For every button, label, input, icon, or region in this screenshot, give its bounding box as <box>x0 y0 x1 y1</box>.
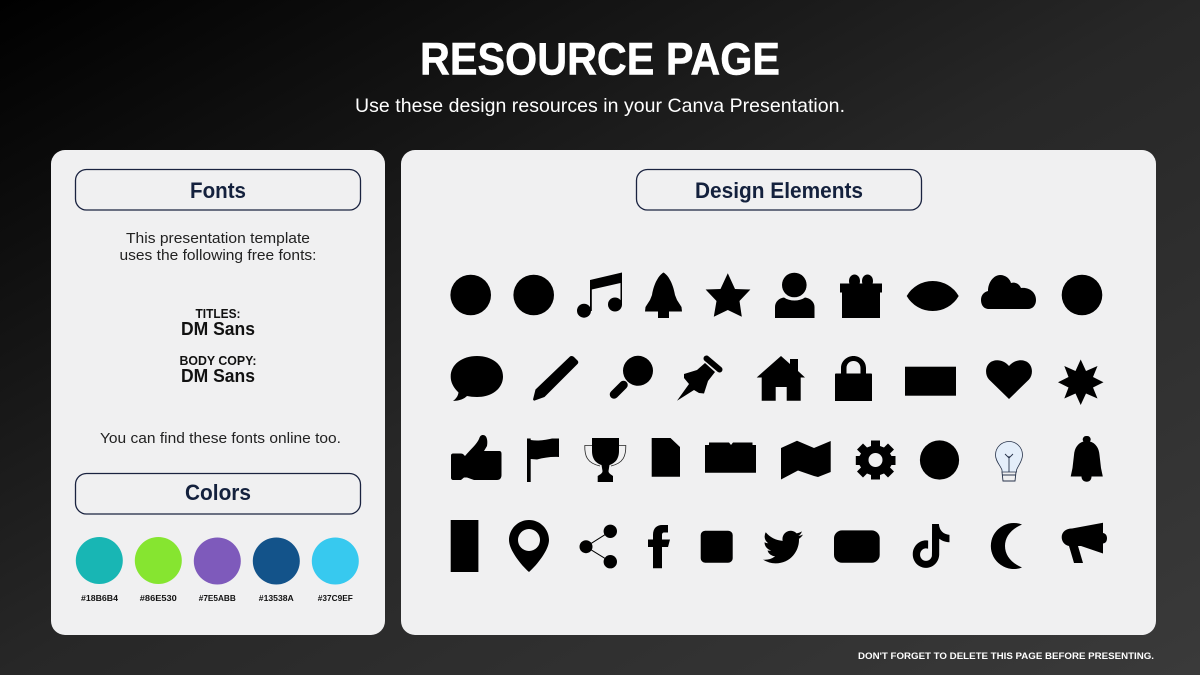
icon: circle <box>513 275 554 315</box>
icon: tall rectangle <box>451 520 478 572</box>
panel: fonts and colors <box>51 150 385 635</box>
icon: lens shape <box>907 281 959 311</box>
icon: light bulb <box>996 442 1022 481</box>
heading: design elements <box>636 170 922 210</box>
color codes: #7E5ABB <box>199 593 236 603</box>
icon: rectangle <box>905 367 956 396</box>
icon: circle <box>450 275 491 315</box>
icon: house <box>757 356 805 401</box>
text block: font intro: This presentation template <box>126 231 310 247</box>
text block: title font <box>181 307 255 339</box>
icon: map pin <box>509 520 549 572</box>
color codes: #37C9EF <box>318 593 353 603</box>
icon: circle <box>920 440 959 480</box>
icon: starburst <box>1058 360 1104 405</box>
color codes <box>81 593 353 603</box>
icon: person <box>775 273 814 318</box>
heading: colors: Colors <box>185 480 251 505</box>
icon: twitter <box>763 531 803 563</box>
heading: fonts: Fonts <box>190 178 246 203</box>
icon: music notes <box>577 272 622 318</box>
color codes: #86E530 <box>140 593 177 603</box>
text block: body font <box>180 354 256 386</box>
icon grid <box>450 272 1107 572</box>
text block: font intro <box>120 231 316 264</box>
icon: pencil <box>533 356 578 401</box>
icon: rocket <box>645 272 682 318</box>
icon: rounded square <box>701 531 733 563</box>
color codes: #13538A <box>259 593 294 603</box>
heading: colors <box>76 474 360 514</box>
icon: megaphone <box>1062 523 1107 563</box>
icon: flag <box>527 438 559 482</box>
text block: font intro: uses the following free fonts: <box>120 248 316 264</box>
icon: crescent moon <box>991 523 1022 569</box>
title: RESOURCE PAGE <box>420 34 780 84</box>
icon: star <box>706 273 750 317</box>
icon: bell <box>1071 436 1103 482</box>
heading: fonts <box>76 170 360 210</box>
subtitle: Use these design resources in your Canva Presentation. <box>355 95 845 117</box>
icon: push pin <box>677 358 720 401</box>
icon: thumbs up <box>451 435 502 480</box>
icon: magnifier <box>614 356 653 394</box>
color codes: #18B6B4 <box>81 593 118 603</box>
icon: share <box>580 525 617 568</box>
icon: cloud <box>981 275 1036 309</box>
text block: body font: BODY COPY: <box>180 354 256 368</box>
icon: gift <box>840 274 882 318</box>
icon: open book <box>705 442 756 473</box>
icon: heart <box>986 360 1032 399</box>
icon: circle <box>1062 275 1102 315</box>
icon: tiktok <box>913 524 949 568</box>
text block: fonts note: You can find these fonts online too. <box>100 431 341 447</box>
icon: gear <box>856 440 896 480</box>
heading: design elements: Design Elements <box>695 178 863 203</box>
panel: design elements <box>401 150 1156 635</box>
icon: trophy <box>585 438 626 482</box>
text block: body font: DM Sans <box>181 366 255 386</box>
icon: folded map <box>781 441 831 480</box>
icon: rounded rectangle <box>834 530 880 563</box>
icon: facebook <box>648 525 670 568</box>
icon: padlock <box>835 356 872 401</box>
footer note: DON'T FORGET TO DELETE THIS PAGE BEFORE PRESENTING. <box>858 651 1154 662</box>
text block: title font: TITLES: <box>196 307 240 321</box>
icon: document <box>652 438 680 477</box>
text block: title font: DM Sans <box>181 319 255 339</box>
icon: speech bubble <box>451 356 503 401</box>
color swatches <box>76 537 359 584</box>
